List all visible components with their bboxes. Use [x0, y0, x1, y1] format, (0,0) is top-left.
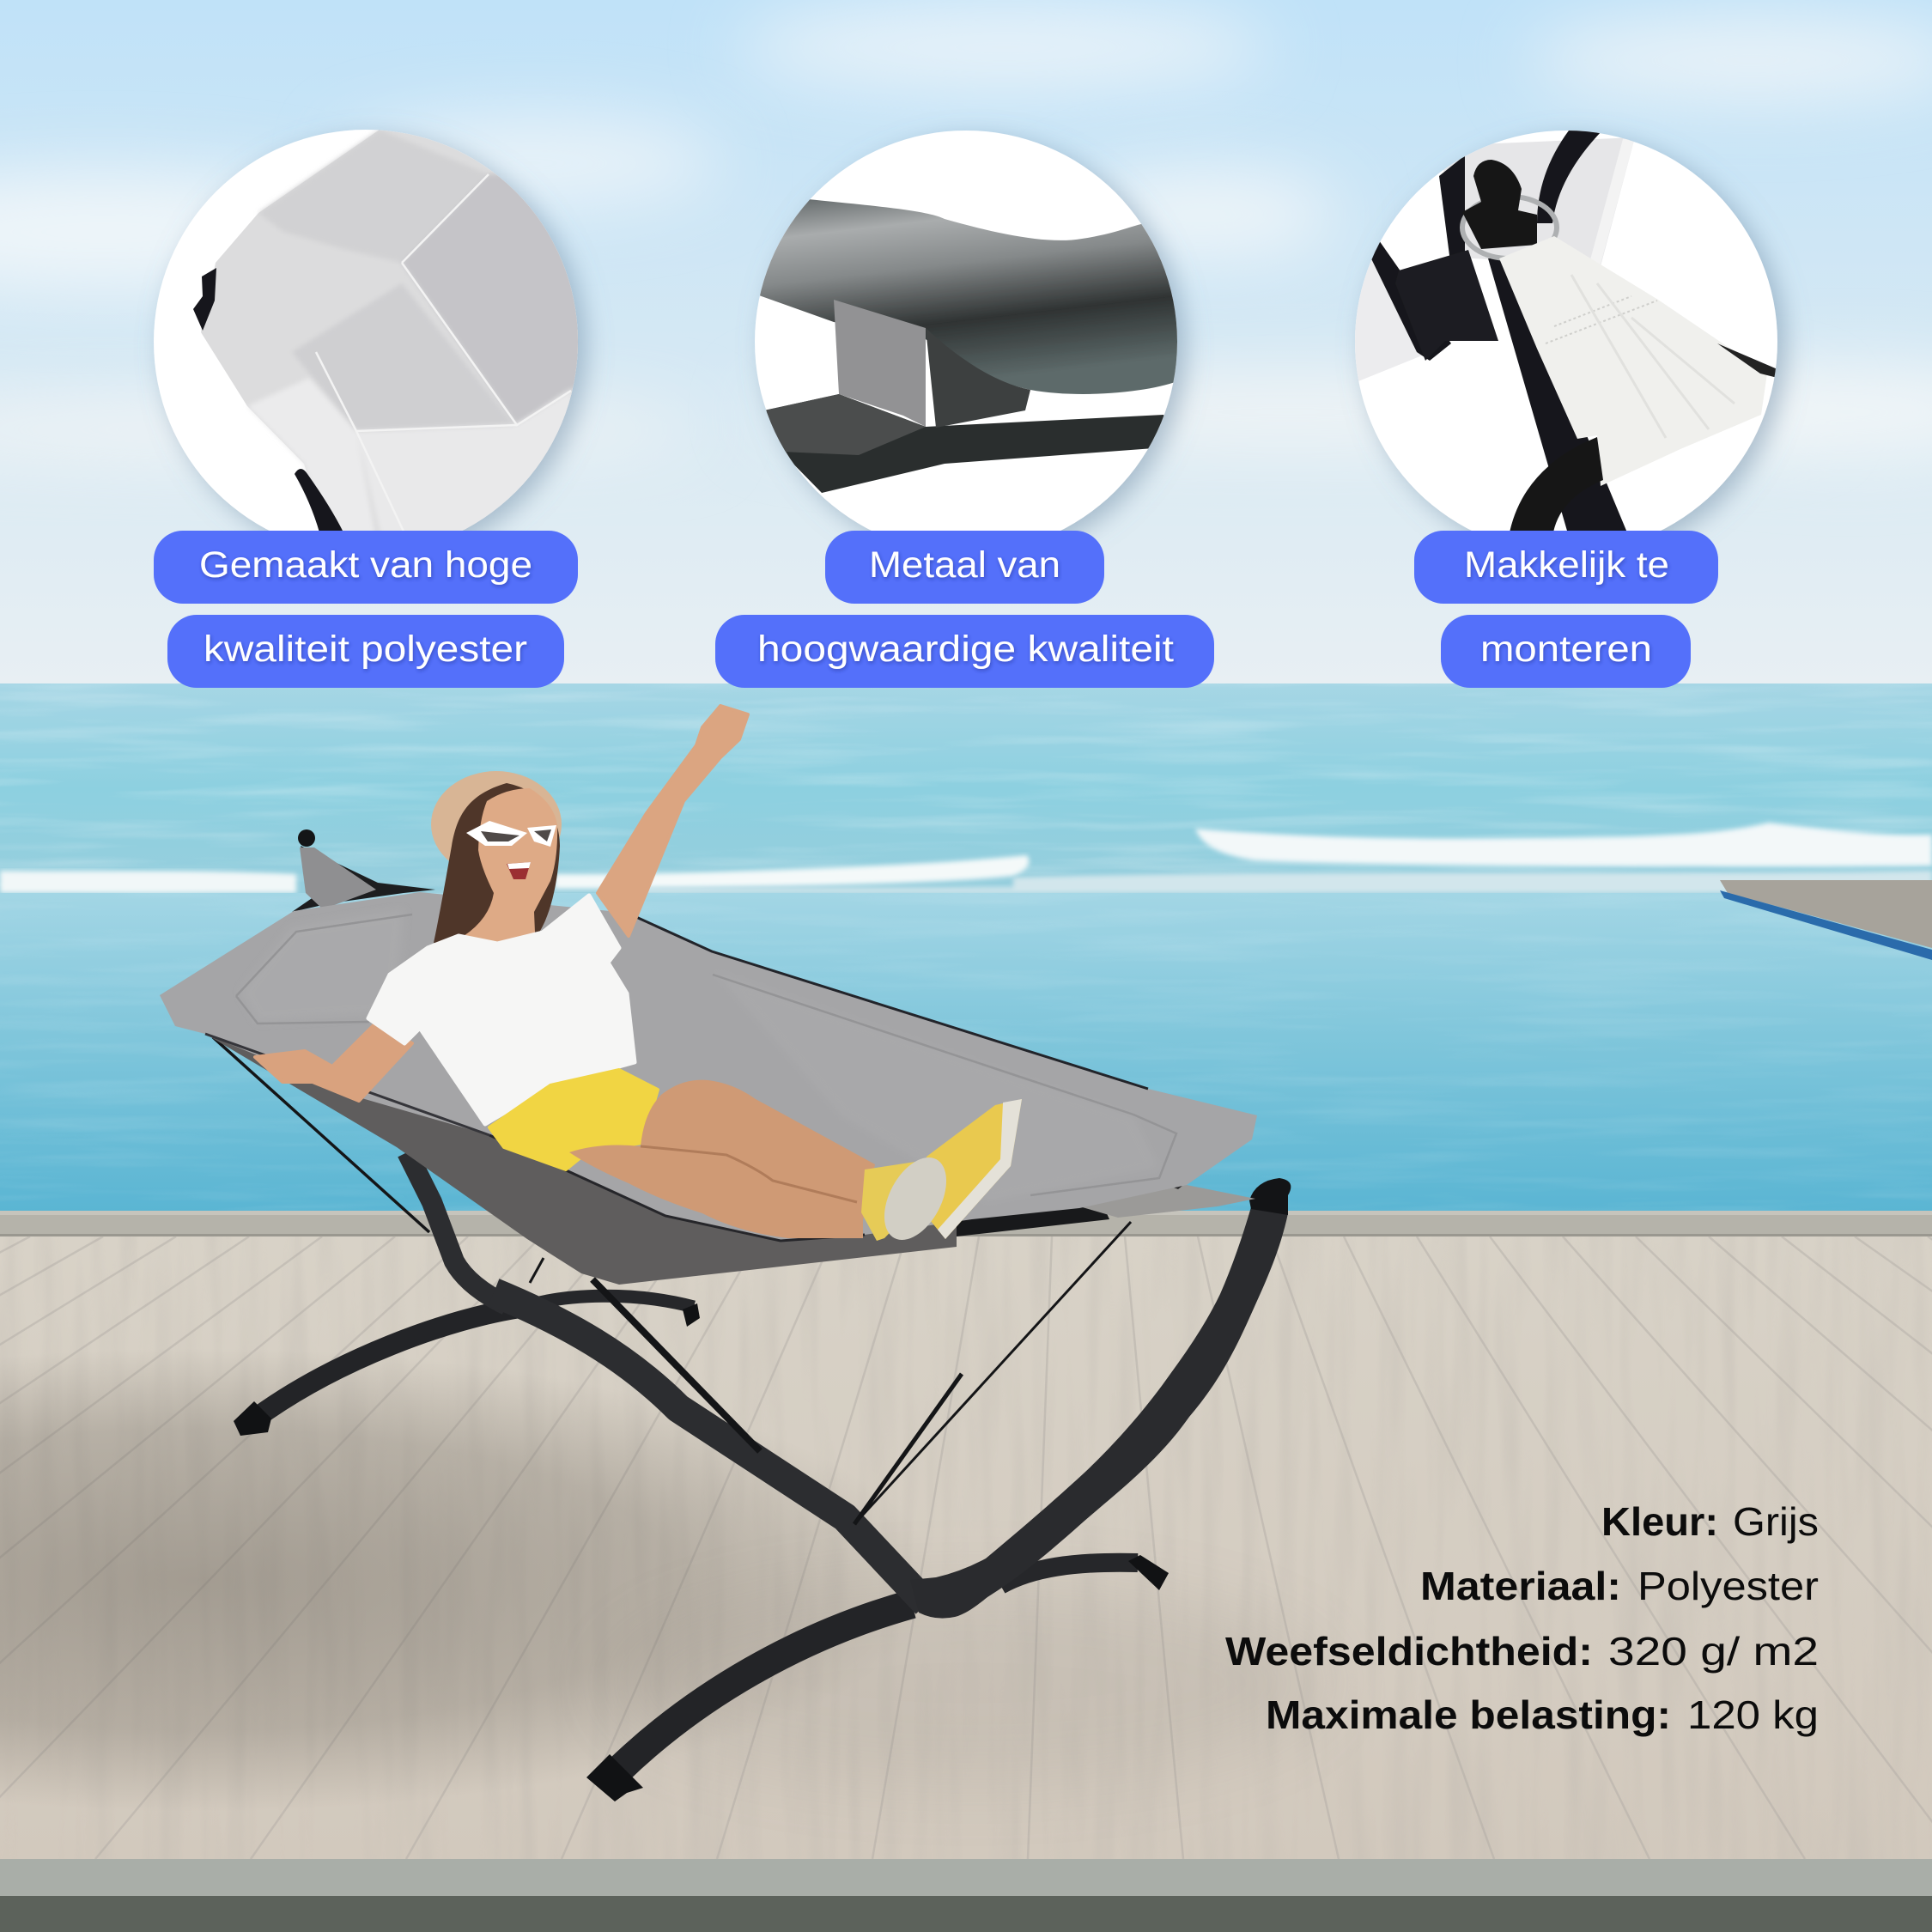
specification: Kleur: Kleur: — [1601, 1499, 1718, 1544]
label pill: monteren — [1441, 615, 1691, 688]
hammock support ropes — [213, 1037, 1131, 1524]
sea with waves — [0, 683, 1932, 894]
face and neck — [464, 788, 557, 945]
hammock head end hook — [292, 829, 435, 912]
sunglasses — [466, 821, 556, 847]
hammock end strap and bar — [953, 1167, 1255, 1236]
specification: Kleur — [1601, 1499, 1819, 1544]
legs — [569, 1080, 875, 1238]
label pill: hoogwaardige kwaliteit — [715, 615, 1214, 688]
circle photo: polyester fabric — [151, 125, 598, 531]
specification: Weefseldichtheid — [1225, 1629, 1819, 1674]
woman relaxing in hammock — [255, 706, 1022, 1250]
specification: Weefseldichtheid: Weefseldichtheid: — [1225, 1629, 1593, 1674]
specification: Materiaal: Polyester — [1637, 1564, 1819, 1608]
pool corner platform — [1720, 880, 1932, 960]
label pill: Metaal van — [825, 531, 1104, 604]
sky background with clouds — [0, 0, 1932, 687]
label pill: Makkelijk te — [1414, 531, 1718, 604]
hat — [431, 771, 562, 878]
specification: Materiaal — [1420, 1564, 1819, 1608]
specification: Maximale belasting: 120 kg — [1687, 1692, 1819, 1737]
open mouth — [507, 862, 531, 879]
yellow shorts — [489, 1070, 658, 1170]
bottom kerb — [0, 1859, 1932, 1932]
specification: Materiaal: Materiaal: — [1420, 1564, 1621, 1608]
label pill: monteren: monteren — [1480, 629, 1652, 670]
circle photo: easy assembly hook — [1348, 120, 1786, 558]
wooden deck — [0, 1236, 1932, 1859]
hammock fabric top — [160, 892, 1257, 1241]
label pill: hoogwaardige kwaliteit: hoogwaardige kwaliteit — [757, 629, 1174, 670]
specification: Maximale belasting: Maximale belasting: — [1266, 1692, 1671, 1737]
label pill: Makkelijk te: Makkelijk te — [1464, 544, 1669, 586]
specification: Weefseldichtheid: 320 g/ m2 — [1608, 1629, 1819, 1674]
label pill: kwaliteit polyester: kwaliteit polyester — [204, 629, 527, 670]
left arm and hand — [255, 1024, 412, 1101]
deck coping — [0, 1211, 1932, 1236]
white t-shirt — [368, 896, 635, 1124]
label pill: Gemaakt van hoge: Gemaakt van hoge — [199, 544, 532, 586]
label pill: Metaal van: Metaal van — [869, 544, 1060, 586]
specification: Maximale belasting — [1266, 1692, 1819, 1737]
circle photo: metal frame — [747, 120, 1185, 558]
hammock fabric underside — [205, 1034, 957, 1285]
specification: Kleur: Grijs — [1733, 1499, 1819, 1544]
yellow sneakers — [861, 1099, 1022, 1250]
raised arm and hand — [598, 706, 748, 936]
hair — [434, 783, 560, 943]
hammock stand frame — [234, 1152, 1291, 1801]
infinity pool water — [0, 893, 1932, 1212]
label pill: kwaliteit polyester — [167, 615, 564, 688]
label pill: Gemaakt van hoge — [154, 531, 578, 604]
